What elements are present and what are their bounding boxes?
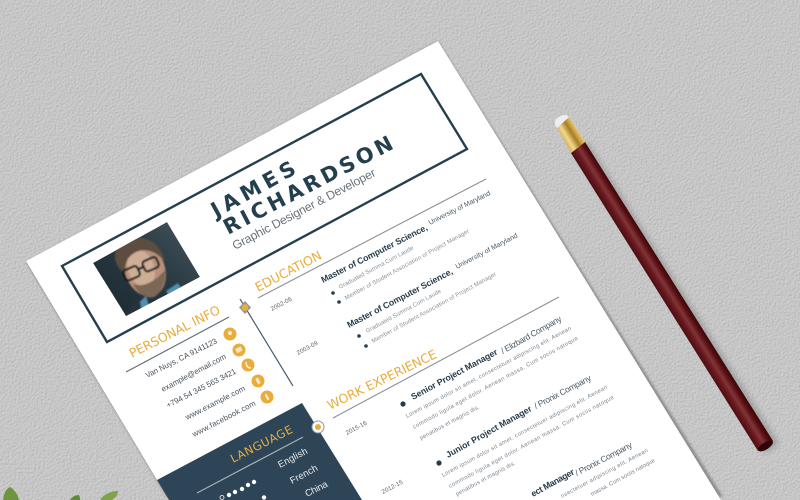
- contact lines: [144, 336, 257, 439]
- education section: [252, 179, 519, 357]
- work dates: 2012-15: [381, 479, 405, 496]
- contact lines: +794 54 345 563 3421: [165, 367, 238, 410]
- education entry one: Member of Student Association of Project Manager: [344, 229, 471, 302]
- education dates: 2002-06: [270, 296, 294, 313]
- language names: English: [276, 446, 310, 471]
- education entry one: Master of Computer Science,: [319, 222, 429, 285]
- job one: Senior Project Manager: [409, 347, 500, 402]
- education entry two: Graduated Summa Cum Laude: [365, 288, 443, 335]
- education entry one: University of Maryland: [428, 190, 492, 227]
- pencil shadow: [574, 142, 779, 454]
- education dates: 2003-09: [296, 340, 320, 357]
- work heading: WORK EXPERIENCE: [325, 346, 439, 413]
- job one: / Elizbard Company: [499, 313, 564, 356]
- jacket and shirt: [124, 286, 182, 316]
- job three, cut off by the frame: massa. Cum sociis natoque: [590, 458, 656, 498]
- portrait figure: [114, 238, 182, 316]
- job one: penatibus et magnis dis.: [419, 404, 481, 442]
- resume sheet: [26, 41, 721, 500]
- education entry two: Member of Student Association of Project Manager: [371, 272, 498, 345]
- education dates: [270, 296, 320, 357]
- education heading: EDUCATION: [252, 248, 324, 295]
- name: RICHARDSON: [219, 131, 397, 239]
- personal info section: [126, 302, 274, 439]
- contact lines: www.facebook.com: [190, 399, 257, 439]
- glasses: [123, 256, 160, 281]
- pencil body: [571, 142, 773, 451]
- job three, cut off by the frame: nsectetuer adipiscing elit. Aenean: [560, 448, 649, 500]
- name: JAMES: [205, 156, 300, 223]
- work timeline marker: [312, 421, 324, 433]
- work dates: [345, 420, 405, 496]
- pencil ferrule: [557, 117, 585, 153]
- education entry one: [319, 190, 492, 304]
- paper shadow: [26, 41, 723, 497]
- job two: penatibus et magnis dis.: [455, 460, 517, 498]
- education entry one: Graduated Summa Cum Laude: [338, 245, 415, 291]
- job one: Lorem ipsum dolor sit amet, consectetuer adipiscing elit. Aenean: [405, 326, 573, 420]
- job two: commodo ligula eget dolor. Aenean massa. Cum sociis natoque: [448, 395, 615, 490]
- timeline marker: [239, 301, 251, 314]
- language names: China: [303, 479, 330, 500]
- language panel: [157, 403, 362, 500]
- contact icons: [224, 328, 274, 404]
- contact lines: example@email.com: [160, 352, 228, 394]
- job two: / Pronix Company: [532, 372, 593, 411]
- job title: Graphic Designer & Developer: [230, 166, 378, 253]
- portrait photo: [93, 222, 200, 325]
- contact lines: Van Nuys, CA 9141123: [144, 336, 219, 380]
- job one: commodo ligula eget dolor. Aenean massa. Cum sociis natoque: [412, 336, 579, 431]
- timeline: [239, 299, 293, 386]
- pencil: [555, 115, 779, 454]
- hair: [115, 238, 165, 272]
- header frame: [62, 74, 467, 342]
- face: [124, 249, 167, 296]
- contact lines: www.example.com: [183, 384, 247, 422]
- personal info heading: PERSONAL INFO: [127, 302, 223, 361]
- work dates: 2015-16: [345, 420, 369, 437]
- job two: Lorem ipsum dolor sit amet, consectetuer adipiscing elit. Aenean: [441, 385, 609, 479]
- education entry two: University of Maryland: [455, 232, 519, 271]
- work experience section: [325, 297, 656, 500]
- language names: French: [288, 463, 320, 487]
- beard: [133, 270, 165, 297]
- education entry two: Master of Computer Science,: [345, 266, 454, 330]
- plant leaves: [3, 487, 118, 500]
- language names: [276, 446, 330, 500]
- job three, cut off by the frame: ect Manager: [529, 466, 576, 499]
- job one: [400, 313, 579, 442]
- job three, cut off by the frame: / Pronix Company: [573, 439, 634, 478]
- language rating dots: [220, 480, 266, 500]
- job two: Junior Project Manager: [444, 403, 534, 460]
- pencil eraser: [555, 115, 569, 128]
- language heading: LANGUAGE: [228, 422, 295, 466]
- education entry two: [345, 232, 519, 348]
- job three, cut off by the frame: [529, 439, 656, 500]
- pencil end: [756, 439, 775, 453]
